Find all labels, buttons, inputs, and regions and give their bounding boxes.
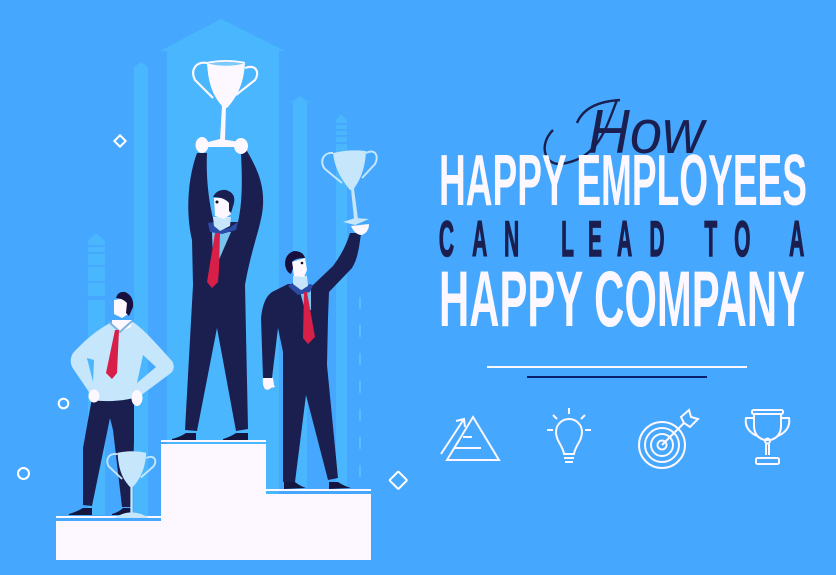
divider lines xyxy=(487,366,747,378)
trophy held by the right man xyxy=(322,150,377,225)
title: How: How xyxy=(588,98,708,167)
icon: light bulb xyxy=(547,408,591,462)
podium xyxy=(56,440,371,560)
icon: pyramid with arrow xyxy=(441,417,499,460)
icon: target with arrow xyxy=(639,410,698,468)
figure: right man holding trophy xyxy=(261,224,369,489)
trophy held by the centre man xyxy=(193,60,257,147)
icon: trophy xyxy=(746,410,789,464)
figure: left man with hands on hips xyxy=(69,292,174,515)
figure: centre man lifting trophy xyxy=(172,137,263,440)
title xyxy=(439,98,807,343)
background arrows xyxy=(87,19,360,518)
trophy on the floor xyxy=(107,451,155,518)
title: CAN LEAD TO A: CANLEADTOA xyxy=(439,212,804,268)
decorative diamonds and circles xyxy=(18,135,407,489)
